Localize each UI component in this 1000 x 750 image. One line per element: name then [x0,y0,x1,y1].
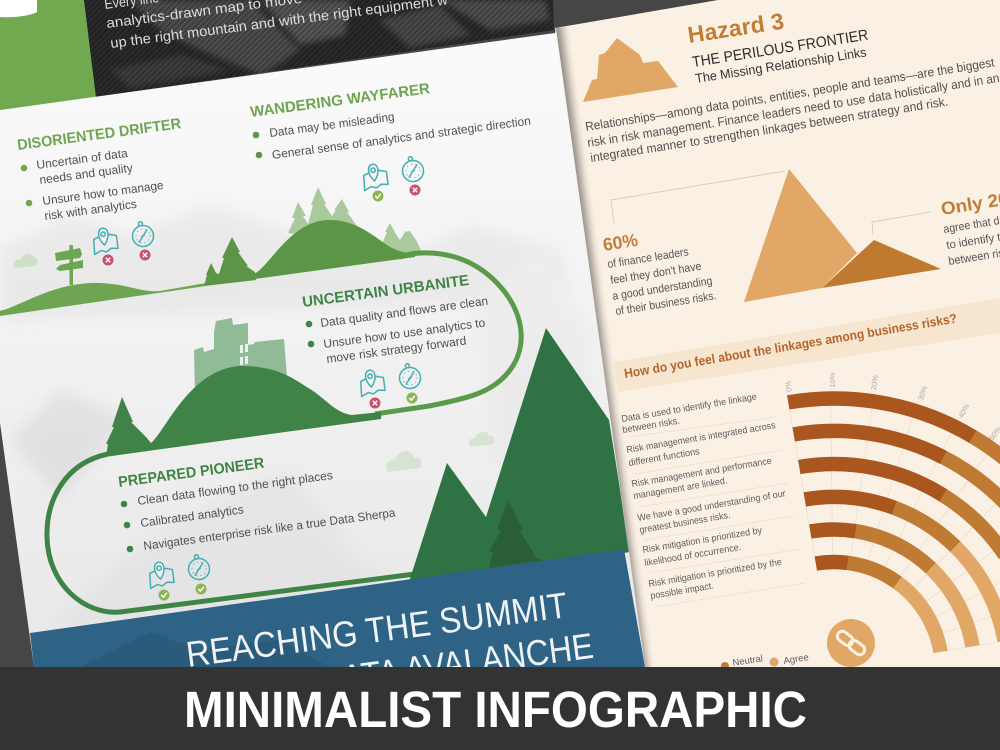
section: wandering wayfarer [249,80,532,202]
row labels: possible impact. [650,581,715,602]
icon: signpost [55,245,83,285]
arc row 4 [805,497,1000,641]
light trees [288,187,422,260]
row labels: Data is used to identify the linkage [621,391,758,425]
section: uncertain urbanite [301,272,489,408]
legend [721,652,810,670]
section: disoriented drifter [16,115,182,266]
bullets: Data quality and flows are clean [320,294,489,330]
callout: 60%: of their business risks. [615,290,717,318]
mountain chart [611,169,941,302]
row labels [621,391,805,607]
icons: map and compass [147,553,211,600]
arc row 2 [794,431,1000,503]
bullets [21,146,165,223]
axis labels: 30% [916,384,929,402]
icon: city buildings [194,318,288,405]
bullets: Unsure how to use analytics to [323,315,486,351]
icon: chain link badge [827,619,875,667]
callout: 60%: feel they don't have [610,261,702,287]
radial chart [786,388,1000,652]
callout: 60%: of finance leaders [607,246,690,271]
page heading: THE PERILOUS FRONTIER [691,27,870,71]
axis labels: 20% [869,374,880,391]
row labels: likelihood of occurrence. [644,542,742,569]
axis labels [783,372,1000,442]
panel: dark photo intro [84,0,554,97]
arc row 3 [799,464,1000,555]
callout: 60%: 60% [601,230,639,255]
dark tree [488,500,546,572]
bullets: Data may be misleading [269,109,395,140]
page heading: Hazard 3 [686,8,786,48]
axis labels: 10% [828,372,837,388]
panel: left poster page [0,28,645,718]
bullets: Calibrated analytics [140,502,244,530]
faded mountain photo [0,205,590,630]
callout: 60%: a good understanding [612,275,713,303]
upper ribbon and hill [204,220,521,414]
bullets: needs and quality [39,161,134,187]
bullets: Unsure how to manage [42,178,165,208]
callout: only 20% [939,186,1000,268]
question band: How do you feel about the linkages among business risks? [623,311,958,381]
icon: cloud [14,254,37,268]
row labels: Risk management is integrated across [626,420,777,456]
row labels: greatest business risks. [639,510,731,536]
axis labels: 40% [956,402,971,420]
arc row 6 [816,562,940,652]
bullets: Uncertain of data [36,146,129,172]
row labels: different functions [628,446,701,469]
bottom banner: MINIMALIST INFOGRAPHIC [184,681,807,738]
mountains [409,328,630,582]
footer headline: REACHING THE SUMMIT [184,584,570,675]
icon: mountain [583,38,678,102]
trees on first ridge [204,237,256,286]
icons: map and compass [358,362,422,408]
legend: Neutral [732,653,764,669]
arc row 1 [788,399,1000,459]
icon: white cylinder [0,0,37,17]
lower ribbon [47,416,415,612]
intro paragraph: integrated manner to strengthen linkages between strategy and risk. [589,95,949,165]
panel: green cover corner [0,0,96,110]
panel: right report page [555,0,1000,670]
blue footer [30,549,645,718]
footer headline: OF THE DATA AVALANCHE [192,625,596,718]
icons: map and compass [91,220,155,266]
heading: UNCERTAIN URBANITE [301,272,470,311]
callout: 60% [601,230,717,318]
clouds [387,432,494,472]
row labels: management are linked. [633,475,728,502]
row labels: Risk management and performance [631,456,773,490]
bullets [306,294,489,366]
arc row 5 [810,529,972,646]
bullets: Navigates enterprise risk like a true Data Sherpa [143,505,396,553]
bullets: Clean data flowing to the right places [137,468,334,508]
heading: WANDERING WAYFARER [249,80,431,121]
bottom banner [0,667,1000,750]
page heading [686,8,870,86]
bullets: risk with analytics [44,197,138,223]
heading: PREPARED PIONEER [117,455,265,491]
row labels: We have a good understanding of our [637,488,786,524]
page heading: The Missing Relationship Links [694,44,868,86]
bullets: move risk strategy forward [326,333,467,366]
row labels: Risk mitigation is prioritized by [642,525,763,556]
ground hill [0,283,206,316]
bullets: General sense of analytics and strategic direction [271,114,532,162]
grid ticks [786,388,1000,652]
axis labels: 0% [783,380,794,392]
icons: map and compass [361,155,425,202]
bullets [121,468,396,553]
heading: DISORIENTED DRIFTER [16,115,182,154]
section: prepared pioneer [117,455,396,600]
legend: Agree [783,652,810,667]
lower hill and tree [106,366,381,456]
row labels: between risks. [622,416,681,436]
footer headline [184,584,596,718]
row labels: Risk mitigation is prioritized by the [648,557,783,590]
